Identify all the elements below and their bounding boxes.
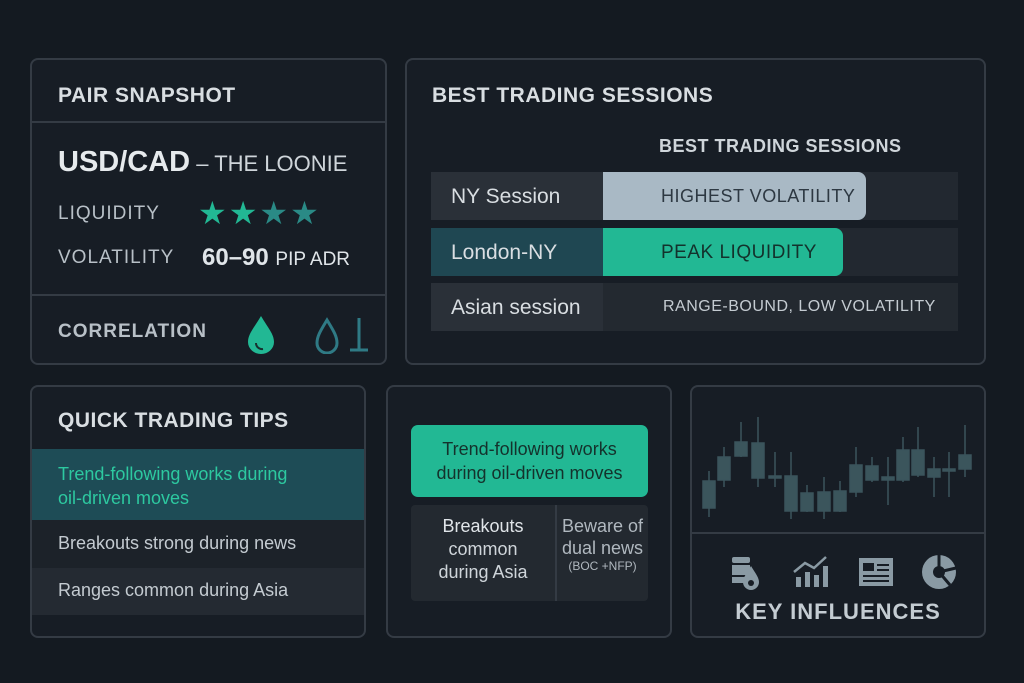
tip 1 [32,449,364,520]
card: trend-following [411,425,648,497]
heading: BEST TRADING SESSIONS [432,84,713,107]
tip 1: oil-driven moves [58,488,189,508]
text: USD/CAD: USD/CAD – THE LOONIE [58,146,347,178]
volatility row [58,244,350,271]
card: trend-following: Trend-following works during oil-driven moves [436,439,623,483]
tip 1: Trend-following works during [58,464,287,484]
tip 3: Ranges common during Asia [58,580,288,600]
row: NY: NY Session [451,185,560,208]
icon: oil drops [248,316,368,354]
bar: highest volatility [603,172,866,220]
row: Asian: RANGE-BOUND, LOW VOLATILITY [663,298,936,315]
card: breakouts / beware [411,505,648,601]
tip 3 [32,568,364,615]
panel: key influences [690,385,986,638]
volatility row: 60–90 PIP ADR [202,244,350,271]
card: breakouts / beware: Breakouts [442,516,524,536]
icons: influences [732,555,956,590]
bar: peak liquidity: PEAK LIQUIDITY [661,242,817,263]
volatility row: VOLATILITY [58,247,174,268]
subheading: BEST TRADING SESSIONS [659,136,902,156]
liquidity row: ★★★★ [198,195,321,231]
label: key influences: KEY INFLUENCES [735,599,941,624]
panel: best trading sessions [405,58,986,365]
correlation row: CORRELATION [58,321,207,342]
correlation row [58,316,368,354]
row: London-NY: London-NY [451,241,557,264]
heading: QUICK TRADING TIPS [58,409,289,432]
row: Asian: Asian session [451,296,581,319]
row: NY [431,172,958,220]
card: breakouts / beware: (BOC +NFP) [568,559,637,573]
heading: pair snapshot: PAIR SNAPSHOT [58,84,236,107]
tip 2: Breakouts strong during news [58,533,296,553]
card: breakouts / beware: during Asia [438,562,528,582]
liquidity row [58,195,321,231]
bar: peak liquidity [603,228,843,276]
row: Asian [431,283,958,331]
chart: candlesticks [702,417,972,519]
card: breakouts / beware: common [448,539,518,559]
row: London-NY [431,228,958,276]
panel: tips cards [386,385,672,638]
panel: quick trading tips [30,385,366,638]
panel: pair snapshot [30,58,387,365]
tip 2 [32,520,364,568]
bar: highest volatility: HIGHEST VOLATILITY [661,186,855,206]
card: breakouts / beware: Beware of dual news [562,516,643,558]
liquidity row: LIQUIDITY [58,203,160,224]
